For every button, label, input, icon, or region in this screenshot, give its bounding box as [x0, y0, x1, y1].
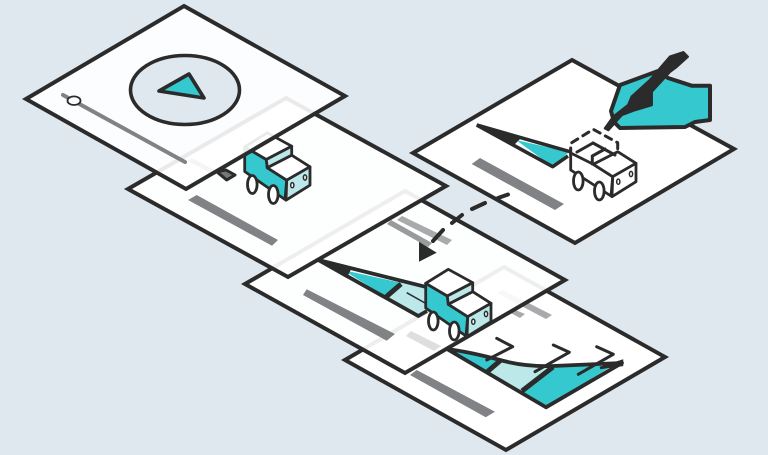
panel: bottom frame with chart	[345, 267, 665, 450]
frame bar	[472, 158, 564, 210]
brackets	[487, 338, 513, 360]
panel: sketch frame	[413, 60, 734, 243]
area chart	[318, 260, 427, 316]
icon: car	[426, 269, 491, 340]
progress slider	[63, 95, 185, 162]
panel: top video frame	[26, 6, 345, 189]
panel: second frame with car	[128, 98, 446, 277]
play button circle	[130, 56, 240, 124]
upper ghost bars	[387, 216, 452, 247]
frame bar	[303, 289, 395, 341]
arrow: dashed arrow from sketch to frame	[419, 194, 508, 262]
icon: car outline	[571, 129, 636, 200]
icon: play triangle	[159, 74, 204, 98]
icon: hand holding pen	[605, 52, 710, 130]
faint lower ghost bar	[406, 331, 441, 351]
icon: car	[245, 133, 310, 204]
panel: third frame with chart and car	[245, 191, 565, 373]
area chart	[447, 338, 622, 407]
frame bar	[410, 370, 495, 417]
sketched chart	[477, 125, 570, 167]
upper ghost bars	[497, 290, 552, 319]
hidden chart tip	[188, 158, 235, 180]
frame bar	[188, 195, 278, 246]
